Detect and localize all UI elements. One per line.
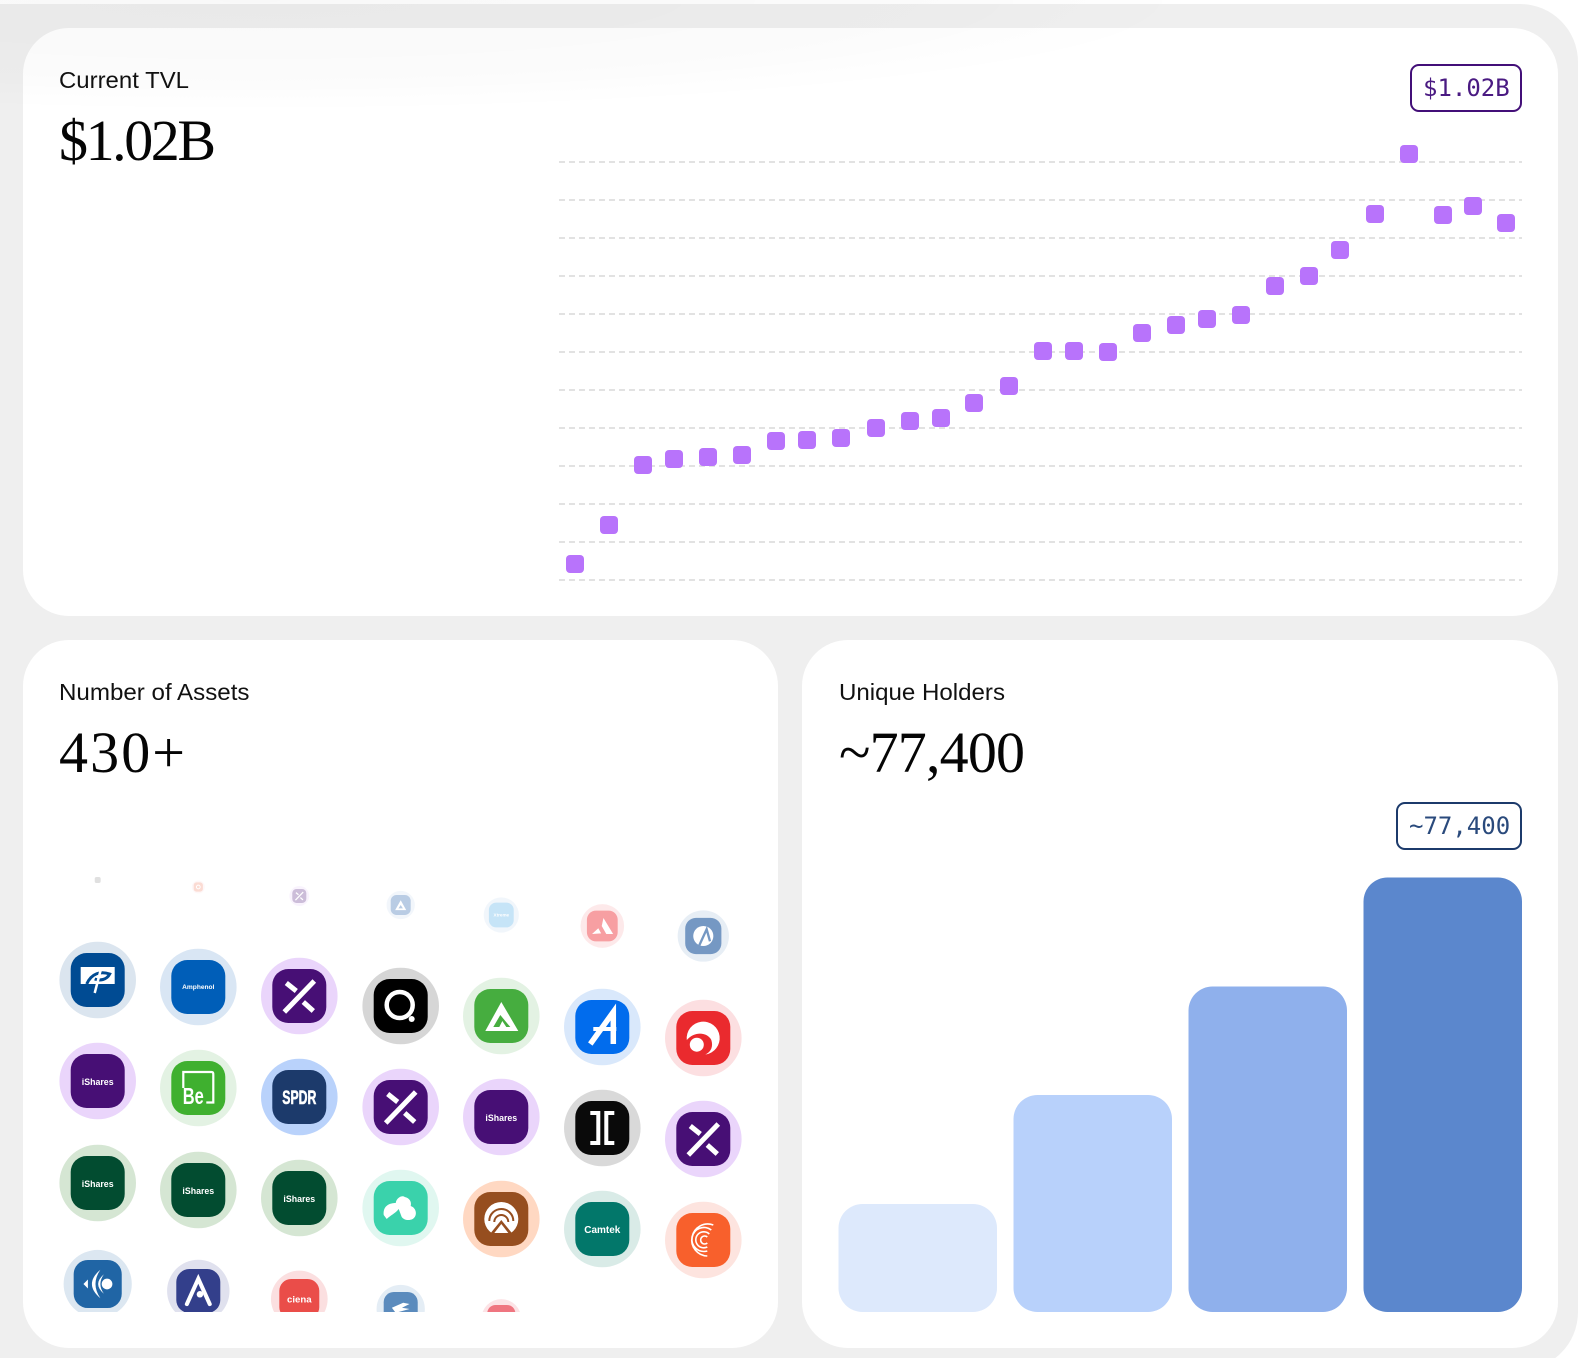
panel: current TVL	[23, 28, 1558, 616]
value: current TVL: $1.02B	[59, 108, 216, 173]
icon row 2: iShares	[82, 1077, 114, 1087]
icon row 2	[59, 1043, 742, 1177]
value: unique holders: ~77,400	[839, 720, 1025, 785]
icon row 2: Be	[183, 1083, 204, 1109]
label: current TVL: Current TVL	[59, 67, 189, 93]
icon row 3: iShares	[82, 1179, 114, 1189]
icon row 2: iShares	[485, 1113, 517, 1123]
panel: number of assets	[23, 640, 778, 1348]
scatter chart: TVL growth	[559, 145, 1522, 580]
callout: holders badge	[1397, 803, 1521, 849]
icon row: fading top: Xtreme	[494, 912, 510, 917]
icon row: fading top	[95, 877, 729, 962]
bar chart: holders growth	[838, 878, 1522, 1312]
value: number of assets: 430+	[59, 720, 185, 785]
callout: TVL badge	[1411, 65, 1521, 111]
label: number of assets: Number of Assets	[59, 679, 250, 705]
icon row 3: iShares	[182, 1186, 214, 1196]
panel: unique holders	[802, 640, 1558, 1348]
callout: TVL badge: $1.02B	[1423, 74, 1510, 102]
label: unique holders: Unique Holders	[839, 679, 1005, 705]
icon row 3	[59, 1145, 742, 1278]
icon row 3: Camtek	[584, 1225, 621, 1236]
icon row 1	[59, 942, 742, 1076]
icon row 4: clipped	[64, 1250, 520, 1312]
icon row 4: clipped: ciena	[287, 1295, 312, 1306]
icon row 2: SPDR	[282, 1088, 316, 1109]
top shading	[0, 0, 1300, 118]
icon row 1: Amphenol	[182, 984, 215, 991]
callout: holders badge: ~77,400	[1409, 812, 1510, 840]
icon row 3: iShares	[283, 1194, 315, 1204]
icon grid: asset logos	[59, 877, 742, 1339]
